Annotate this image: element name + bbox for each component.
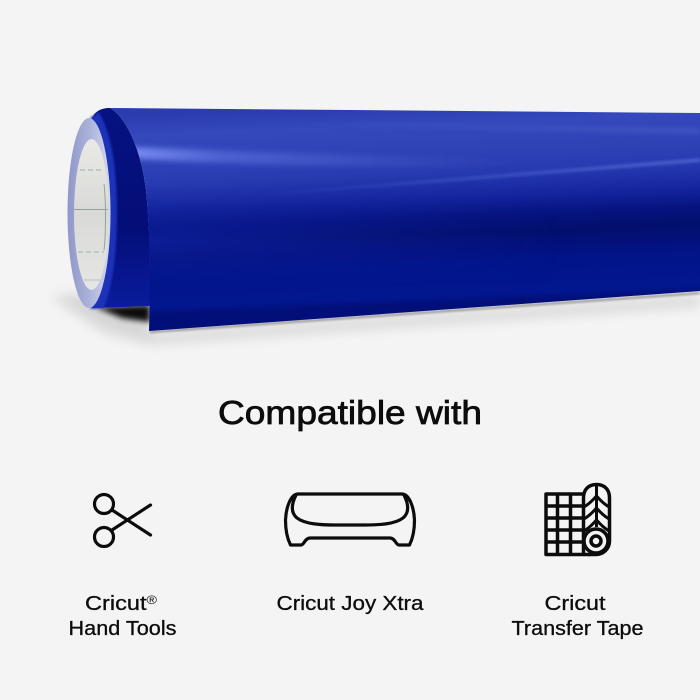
front vinyl sheet bbox=[100, 108, 700, 331]
label: Cricut Hand Tools: Hand Tools bbox=[68, 618, 176, 640]
icon: scissors bbox=[94, 494, 150, 546]
label: Cricut Joy Xtra: Cricut Joy Xtra bbox=[276, 593, 424, 615]
cardboard core opening bbox=[74, 139, 109, 290]
vinyl roll bbox=[50, 108, 700, 344]
icon: transfer tape roll bbox=[546, 484, 610, 554]
inner wrapped band of vinyl bbox=[92, 108, 150, 308]
label: Cricut Transfer Tape: Cricut bbox=[544, 593, 606, 615]
label: Cricut Hand Tools: Cricut bbox=[85, 593, 137, 615]
icon: Cricut Joy Xtra machine bbox=[286, 494, 414, 545]
label: Cricut Transfer Tape bbox=[512, 593, 644, 640]
roll shadow bbox=[50, 292, 700, 344]
label: Cricut Hand Tools: ® bbox=[147, 593, 157, 607]
heading: Compatible with bbox=[218, 395, 482, 432]
roll end rim bbox=[68, 118, 110, 308]
tape grid bbox=[546, 494, 590, 554]
label: Cricut Hand Tools bbox=[68, 593, 176, 640]
label: Cricut Transfer Tape: Transfer Tape bbox=[512, 618, 644, 640]
tape roll body bbox=[584, 484, 610, 554]
